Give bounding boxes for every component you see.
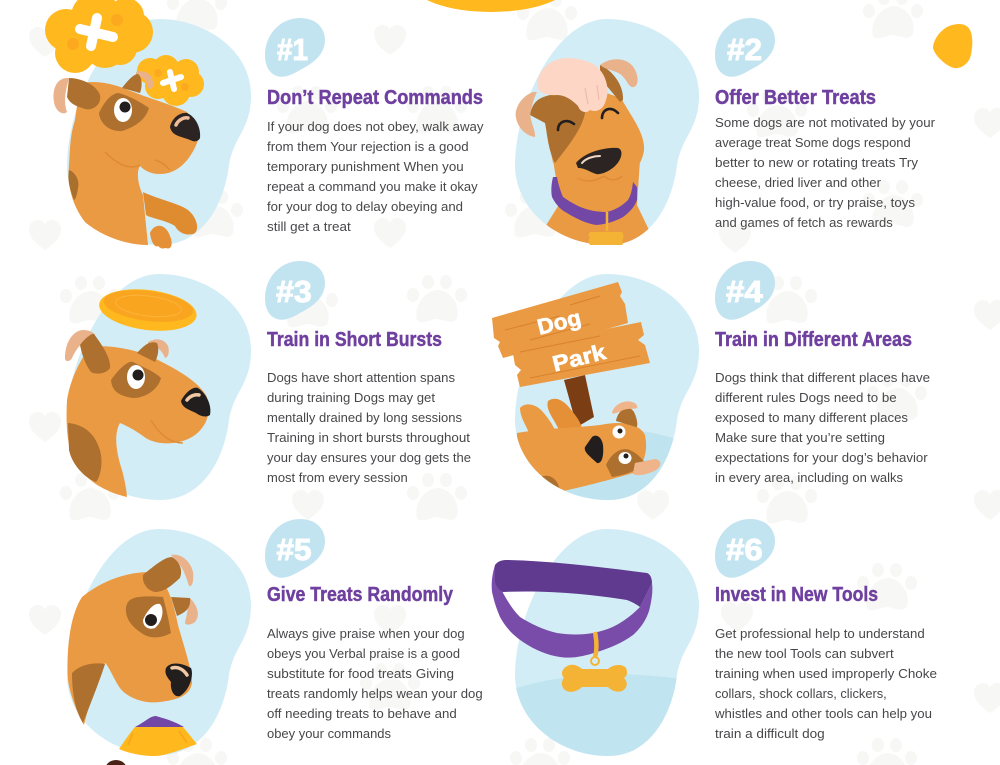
top ear (143, 555, 193, 592)
body text: Get professional help to understand (715, 626, 925, 641)
eyes (612, 426, 632, 464)
illustration: dog watching frisbee (65, 274, 251, 500)
floor (516, 674, 676, 756)
heading: Don’t Repeat Commands (267, 87, 483, 109)
body text (267, 370, 471, 485)
left ear (54, 78, 100, 113)
collar (551, 177, 637, 225)
body text: from them Your rejection is a good (267, 139, 469, 154)
body text: treats randomly helps wean your dog (267, 686, 483, 701)
badge #1 (265, 18, 325, 77)
body text: If your dog does not obey, walk away (267, 119, 484, 134)
large thought cloud (45, 0, 153, 73)
eye (143, 604, 162, 629)
body text: still get a treat (267, 219, 351, 234)
nose (165, 664, 192, 696)
dog body (546, 162, 648, 244)
frisbee (97, 284, 199, 336)
bottom plank (512, 322, 650, 387)
body text: obeys you Verbal praise is a good (267, 646, 460, 661)
dog legs (520, 404, 556, 436)
panel: tip 3 (65, 261, 471, 500)
body text: obey your commands (267, 726, 391, 741)
bowl (119, 727, 197, 756)
nose (181, 388, 210, 416)
badge #3 (265, 261, 325, 320)
decorative yellow blob right (933, 24, 972, 68)
tag ring (591, 657, 599, 665)
tag (588, 212, 624, 245)
body text: Training in short bursts throughout (267, 430, 470, 445)
panel: tip 6 (492, 519, 937, 760)
collar back band (495, 560, 652, 607)
panel: tip 4 (492, 261, 930, 510)
heading: Invest in New Tools (715, 584, 878, 606)
body text: Dogs think that different places have (715, 370, 930, 385)
badge #1: #1 (277, 32, 308, 67)
shoulder patch (68, 423, 102, 482)
dog body (517, 423, 646, 492)
head patch (530, 93, 585, 163)
body text: and games of fetch as rewards (715, 215, 893, 230)
body text: exposed to many different places (715, 410, 909, 425)
body text (267, 119, 484, 234)
panel: tip 2 (515, 18, 936, 250)
body text: train a difficult dog (715, 726, 825, 741)
dog (68, 572, 192, 725)
body text: better to new or rotating treats Try (715, 155, 919, 170)
body text: temporary punishment When you (267, 159, 464, 174)
eye patch (126, 596, 171, 637)
body text: most from every session (267, 470, 408, 485)
panel: tip 1 (45, 0, 484, 248)
head (550, 91, 644, 182)
ear up (612, 401, 637, 427)
body text: repeat a command you make it okay (267, 179, 478, 194)
ground (519, 432, 674, 500)
badge #5 (265, 519, 325, 578)
dog body and head (69, 82, 198, 245)
body text: whistles and other tools can help you (714, 706, 932, 721)
face patch (606, 449, 645, 477)
left ear (65, 330, 110, 374)
bone tag (562, 665, 627, 692)
body text: during training Dogs may get (267, 390, 435, 405)
illustration: purple collar with bone tag (492, 529, 700, 760)
heading: Offer Better Treats (715, 87, 876, 109)
tag strap (595, 632, 596, 658)
collar front band (492, 565, 652, 658)
body text: your day ensures your dog gets the (267, 450, 471, 465)
dark brown shape cut off at the bottom edge (105, 760, 127, 765)
body text (715, 115, 936, 230)
nose (576, 148, 621, 174)
mouth (151, 420, 183, 443)
heading: Give Treats Randomly (267, 584, 454, 606)
left ear flap (516, 92, 537, 137)
hand (537, 58, 608, 112)
body text: average treat Some dogs respond (715, 135, 911, 150)
eye patch (111, 362, 161, 398)
second ear (171, 597, 198, 625)
illustration: confused dog with thought clouds (45, 0, 251, 248)
badge #4 (715, 261, 775, 320)
body text: high-value food, or try praise, toys (715, 195, 916, 210)
body text (714, 626, 937, 741)
badge #6: #6 (726, 532, 763, 567)
body text: expectations for your dog’s behavior (715, 450, 928, 465)
badge #5: #5 (276, 532, 312, 567)
heading: Train in Short Bursts (267, 329, 442, 351)
body text: Dogs have short attention spans (267, 370, 456, 385)
top plank (492, 282, 628, 358)
ear low (633, 459, 660, 475)
right ear (137, 339, 169, 362)
dog arm (143, 192, 197, 235)
shoulder patch (72, 663, 105, 723)
nose (170, 113, 200, 141)
badge #3: #3 (276, 274, 312, 309)
body text: for your dog to delay obeying and (267, 199, 463, 214)
badge #2 (715, 18, 775, 77)
panel: tip 5 (67, 519, 483, 756)
body text: mentally drained by long sessions (267, 410, 462, 425)
illustration: dog park sign and rolling dog (492, 274, 705, 510)
body text: training when used improperly Choke (715, 666, 937, 681)
dog (67, 346, 209, 497)
food (135, 716, 184, 727)
small thought cloud (137, 55, 204, 106)
closed eyes (558, 109, 618, 130)
body text: in every area, including on walks (715, 470, 903, 485)
badge #2: #2 (727, 32, 762, 67)
body text: collars, shock collars, clickers, (715, 686, 887, 701)
body text: Make sure that you’re setting (715, 430, 885, 445)
body text: off needing treats to behave and (267, 706, 457, 721)
nose (585, 436, 603, 463)
eye (114, 98, 132, 122)
dog second paw (150, 226, 172, 248)
body text: cheese, dried liver and other (715, 175, 882, 190)
body text (267, 626, 483, 741)
badge #4: #4 (726, 274, 764, 309)
mouth (578, 176, 622, 181)
illustration: dog looking at food bowl (67, 529, 251, 756)
body text: different rules Dogs need to be (715, 390, 897, 405)
illustration: dog park sign and rolling dog: Park (550, 339, 609, 376)
body text: the new tool Tools can subvert (715, 646, 894, 661)
badge #6 (715, 519, 775, 578)
body text: Some dogs are not motivated by your (715, 115, 936, 130)
shoulder patch (68, 170, 78, 200)
decorative yellow blob top centre (411, 0, 571, 12)
heading: Train in Different Areas (715, 329, 912, 351)
mouth line (105, 152, 170, 170)
right ear (122, 71, 153, 93)
eye (127, 365, 145, 389)
body text: Always give praise when your dog (267, 626, 465, 641)
sign text: Dog (535, 305, 583, 340)
signpost (564, 375, 594, 427)
illustration: happy dog being petted (515, 19, 699, 250)
body text: substitute for food treats Giving (267, 666, 454, 681)
body text (715, 370, 930, 485)
right ear (600, 59, 638, 102)
eye patch (99, 93, 149, 131)
